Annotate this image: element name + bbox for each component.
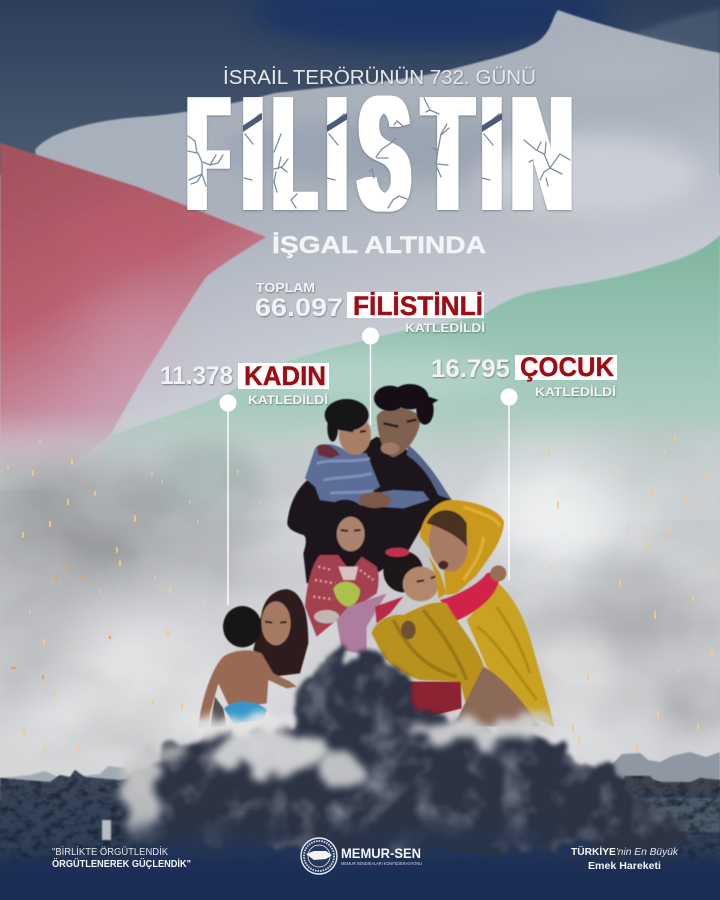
title cracks [188,98,570,208]
footer slogan: "BİRLİKTE ÖRGÜTLENDİK [52,845,168,858]
flag: green stripe [60,235,720,520]
background: Palestinian flag [0,0,720,520]
highlight box [515,355,617,380]
footer motto: TÜRKİYE'nin En Büyük [571,845,679,858]
title: FILISTIN: L [274,62,315,245]
number: 66.097 [255,294,343,322]
logo: Memur-Sen [301,838,422,874]
title: FILISTIN: I [483,63,501,245]
connector line: Filistinli [370,336,372,425]
marker [362,328,379,344]
subtitle: İŞGAL ALTINDA [272,232,486,259]
title: FILISTIN: T [424,63,472,246]
title: FILISTIN: I [328,63,346,245]
flag: white stripe [35,10,720,435]
marker [500,388,518,406]
smoke highlight: right fog [412,719,548,745]
number: 16.795 [431,355,510,383]
title: FILISTIN: F [188,63,228,245]
title: FILISTIN: I [244,63,262,245]
title: FILISTIN [188,61,572,246]
stat: women [160,361,329,412]
connector line: Çocuk [508,397,510,580]
woman with bare-backed child [198,589,308,728]
logo tagline: MEMUR SENDİKALARI KONFEDERASYONU [341,860,422,866]
illustration: family group [198,384,554,728]
city skyline [0,752,720,900]
smoke highlight: left rim [122,753,158,837]
man with child [287,384,452,583]
skyline: right buildings [612,776,720,795]
footer motto: Emek Hareketi [588,860,661,872]
footer slogan [52,845,191,870]
caption: KATLEDİLDİ [248,394,328,407]
footer motto [571,845,679,872]
title: FILISTIN: N [512,61,572,245]
headline: day counter: İSRAİL TERÖRÜNÜN 732. GÜNÜ [223,66,536,89]
title slashes [243,113,502,132]
flag: red triangle [0,143,266,475]
background: smoke mist [0,410,720,790]
highlight box [347,292,484,318]
highlighted word: ÇOCUK [520,352,614,382]
mother in yellow scarf with toddler [372,500,554,727]
highlighted word: KADIN [244,361,326,391]
dark smoke cloud [117,653,700,852]
smoke highlight: centre-left fog [210,730,334,774]
number: 11.378 [160,362,233,390]
embers [8,436,712,752]
skyline: hazy right district [600,752,720,800]
title: FILISTIN: S [359,62,409,246]
logo emblem [301,838,337,874]
footer slogan: ÖRGÜTLENEREK GÜÇLENDİK" [52,857,191,870]
girl in red dress [305,500,387,655]
connector line: Kadın [227,403,229,605]
stat: children [431,352,617,406]
caption: KATLEDİLDİ [535,386,616,399]
highlighted word: FİLİSTİNLİ [353,291,483,321]
highlight box [238,363,329,389]
marker [220,394,236,412]
skyline: hazy left district [0,766,134,800]
caption: KATLEDİLDİ [405,322,485,335]
stat: total Palestinians [255,280,485,344]
skyline: ground [0,770,720,900]
mist texture [0,420,720,780]
smoke highlight: puff [320,754,360,790]
toplam label: TOPLAM [256,280,315,295]
logo wordmark: MEMUR-SEN [341,845,421,861]
flag: dark sky band [0,0,720,175]
